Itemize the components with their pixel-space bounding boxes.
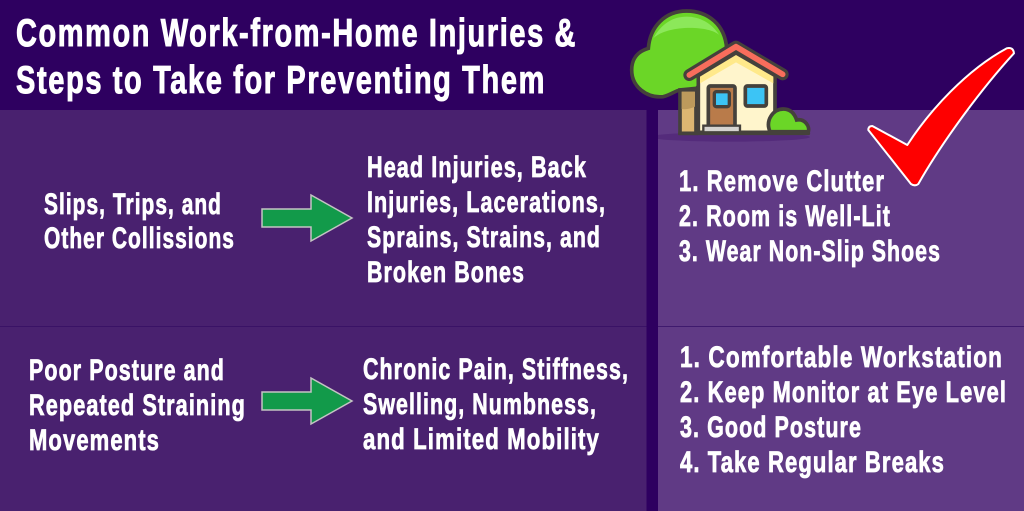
text: injuries list 1	[367, 151, 606, 289]
text: slips, trips and other collisions: Other Collissions	[44, 222, 235, 255]
text: injuries list 1: Injuries, Lacerations,	[367, 186, 606, 219]
text: prevention steps 1	[679, 165, 941, 268]
panel: prevention steps	[658, 110, 1024, 511]
text: injuries list 2	[363, 353, 629, 456]
title: Steps to Take for Preventing Them	[16, 59, 546, 102]
text: prevention steps 2: 3. Good Posture	[680, 411, 862, 444]
text: slips, trips and other collisions	[44, 188, 235, 255]
icon: red check mark	[868, 48, 1014, 185]
text: injuries list 2: Swelling, Numbness,	[363, 388, 597, 421]
text: injuries list 1: Sprains, Strains, and	[367, 221, 601, 254]
text: prevention steps 2	[680, 341, 1007, 479]
text: injuries list 1: Head Injuries, Back	[367, 151, 587, 184]
text: injuries list 2: and Limited Mobility	[363, 423, 600, 456]
title: Common Work-from-Home Injuries &	[16, 12, 577, 55]
text: poor posture and repeated straining: Poor Posture and	[29, 354, 225, 387]
text: injuries list 1: Broken Bones	[367, 256, 525, 289]
text: poor posture and repeated straining: Movements	[29, 424, 160, 457]
text: prevention steps 1: 2. Room is Well-Lit	[679, 200, 891, 233]
text: prevention steps 1: 1. Remove Clutter	[679, 165, 885, 198]
arrow: cause to injuries 1	[262, 195, 352, 241]
arrow: cause to injuries 2	[262, 378, 352, 424]
text: poor posture and repeated straining: Repeated Straining	[29, 389, 246, 422]
text: slips, trips and other collisions: Slips, Trips, and	[44, 188, 222, 221]
title	[16, 12, 577, 102]
text: injuries list 2: Chronic Pain, Stiffness,	[363, 353, 629, 386]
icon: house with tree	[632, 11, 810, 142]
panel: causes and injuries	[0, 110, 646, 511]
text: poor posture and repeated straining	[29, 354, 246, 457]
